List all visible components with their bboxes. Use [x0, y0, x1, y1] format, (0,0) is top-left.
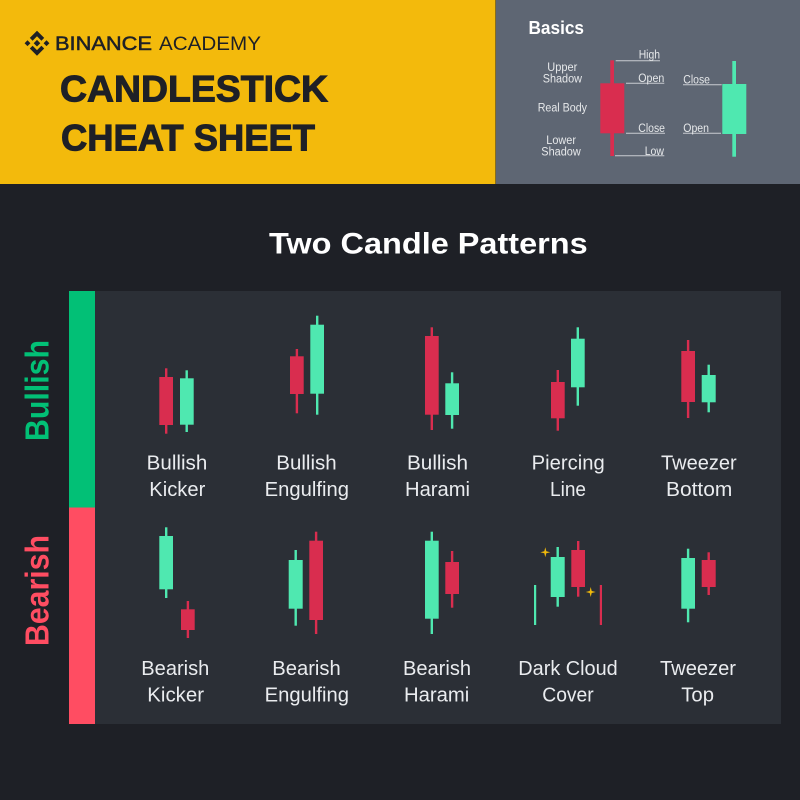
icon: spark lower [586, 587, 596, 597]
bullish candle anatomy: Open [683, 123, 709, 135]
icon: spark upper [540, 547, 550, 557]
shadow and body labels: Upper [547, 62, 577, 74]
pattern: dark cloud cover: Dark Cloud [518, 658, 618, 680]
pattern: tweezer bottom: Bottom [666, 479, 732, 501]
pattern: piercing line [532, 327, 605, 501]
pattern: tweezer bottom: Tweezer [661, 452, 737, 474]
pattern: tweezer top [660, 549, 736, 707]
pattern: bullish engulfing: Bullish [276, 452, 337, 474]
pattern: bearish kicker: Bearish [141, 658, 209, 680]
bullish candle anatomy [683, 61, 746, 157]
shadow and body labels [538, 62, 587, 159]
pattern: tweezer bottom [661, 340, 737, 501]
title: candlestick cheat sheet [60, 69, 328, 159]
shadow and body labels: Shadow [543, 73, 583, 85]
heading: two candle patterns: Two Candle Patterns [269, 227, 588, 260]
bullish candle anatomy: Close [683, 74, 710, 86]
pattern: piercing line: Line [550, 479, 586, 501]
pattern: bullish engulfing [265, 316, 349, 501]
pattern: bullish kicker: Bullish [147, 452, 207, 474]
title: candlestick cheat sheet: CANDLESTICK [60, 69, 328, 110]
pattern: bullish kicker: Kicker [149, 479, 206, 501]
bearish side bar [69, 508, 95, 724]
pattern: bullish harami: Bullish [407, 452, 468, 474]
pattern: piercing line: Piercing [532, 452, 605, 474]
pattern: tweezer top: Top [681, 685, 714, 707]
bearish candle anatomy: High [639, 50, 660, 62]
heading: basics: Basics [528, 18, 584, 38]
row label: bearish: Bearish [18, 535, 55, 646]
bearish candle anatomy: Low [645, 146, 665, 158]
pattern: bullish harami: Harami [405, 479, 470, 501]
pattern: bullish kicker [147, 368, 207, 501]
brand name [55, 33, 261, 55]
pattern: bearish engulfing: Engulfing [265, 685, 349, 707]
title: candlestick cheat sheet: CHEAT SHEET [61, 118, 315, 159]
panel: header brand [0, 0, 496, 184]
pattern: bearish kicker [141, 527, 209, 707]
shadow and body labels: Lower [546, 135, 576, 147]
icon: Binance logo [25, 31, 49, 56]
pattern: dark cloud cover [518, 541, 618, 707]
shadow and body labels: Real Body [538, 103, 587, 115]
pattern: bearish harami: Harami [404, 685, 469, 707]
brand name: BINANCE [55, 33, 152, 55]
row label: bullish: Bullish [18, 340, 55, 441]
pattern: tweezer top: Tweezer [660, 658, 736, 680]
bearish candle anatomy: Close [638, 123, 665, 135]
pattern: bearish harami [403, 532, 471, 707]
shadow and body labels: Shadow [541, 147, 581, 159]
pattern: bullish harami [405, 327, 470, 501]
pattern: bearish harami: Bearish [403, 658, 471, 680]
pattern: dark cloud cover: Cover [542, 685, 594, 707]
pattern: bearish engulfing [265, 532, 349, 707]
pattern: bearish engulfing: Bearish [272, 658, 341, 680]
panel: patterns [18, 291, 781, 724]
pattern: bullish engulfing: Engulfing [265, 479, 349, 501]
panel: basics [496, 0, 800, 184]
bullish side bar [69, 291, 95, 508]
brand name: ACADEMY [159, 33, 261, 55]
bearish candle anatomy: Open [638, 73, 664, 85]
bearish candle anatomy [600, 50, 665, 158]
pattern: bearish kicker: Kicker [147, 685, 204, 707]
